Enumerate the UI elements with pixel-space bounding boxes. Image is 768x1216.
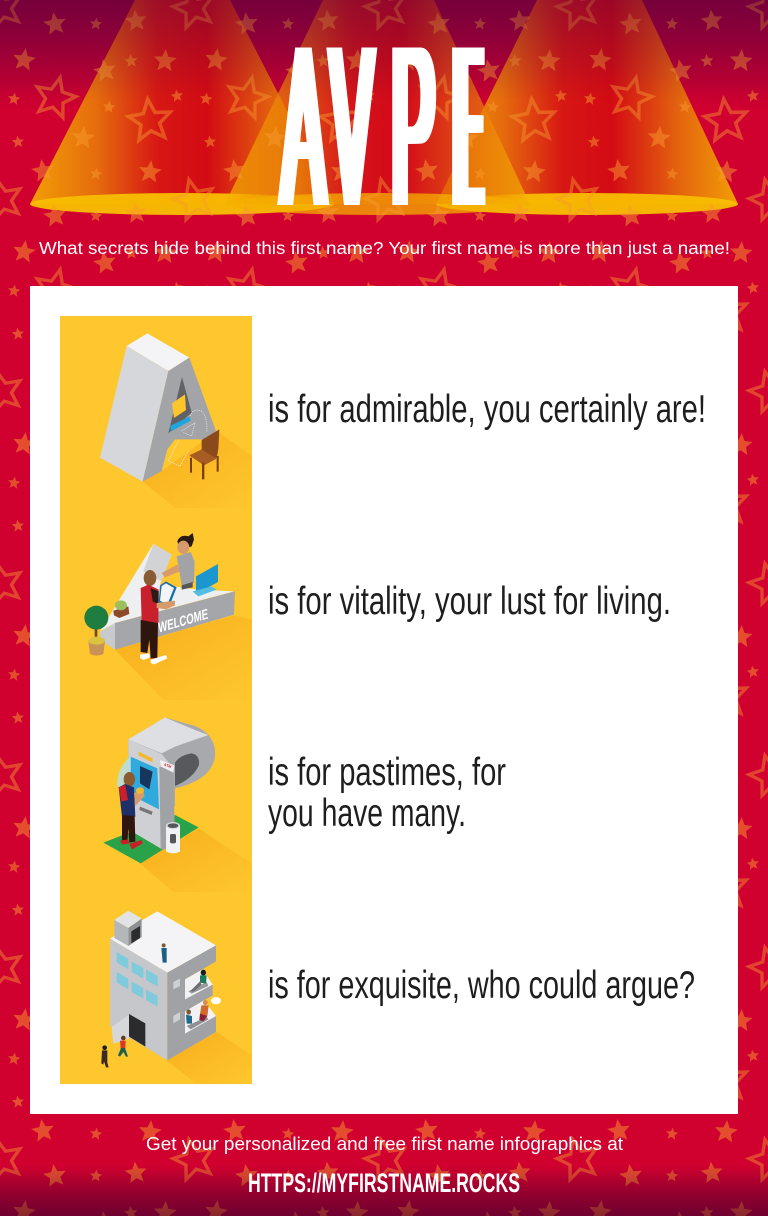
grass mat: [103, 815, 199, 863]
icon: office building shaped like letter E: [101, 911, 252, 1084]
spotlights: [30, 0, 738, 215]
monitor: [193, 564, 218, 596]
icon: reception desk with WELCOME sign: [84, 533, 252, 700]
title: [277, 0, 486, 254]
receptionist: [162, 533, 195, 590]
P bowl: [128, 717, 215, 807]
title: E: [449, 0, 474, 254]
ATM label: ATM: [163, 763, 172, 769]
text: P: you have many.: [268, 792, 466, 835]
potted tree: [84, 606, 108, 656]
white content panel: [30, 286, 738, 1114]
top shading: [0, 0, 768, 100]
customer: [119, 772, 145, 849]
footer line: Get your personalized and free first name infographics at: [146, 1133, 623, 1154]
windows: [117, 952, 158, 1007]
title: P: [387, 0, 430, 254]
text: P: is for pastimes, for: [268, 751, 506, 794]
footer URL: HTTPS://MYFIRSTNAME.ROCKS: [248, 1168, 520, 1198]
label: WELCOME: WELCOME: [158, 605, 209, 636]
subtitle: What secrets hide behind this first name? Your first name is more than just a name!: [39, 238, 730, 258]
spotlight: centre: [225, 0, 530, 215]
walking people: [101, 1036, 128, 1067]
spotlight: left: [30, 0, 335, 215]
stair block: [114, 911, 142, 946]
spotlight: right: [436, 0, 738, 215]
rooftop person: [161, 943, 167, 963]
yellow illustration column: [60, 316, 252, 1084]
title: V: [326, 0, 368, 254]
icon: ATM shaped like letter P: [103, 717, 252, 892]
ATM label: [160, 760, 174, 773]
balcony people: [186, 970, 221, 1024]
small planter: [113, 600, 129, 618]
trash bin: [166, 822, 180, 853]
title: A: [277, 0, 320, 254]
icon: letter A with desk and chair: [100, 333, 252, 508]
text: P: [268, 751, 506, 835]
visitor: [140, 570, 177, 664]
entrance: [112, 1014, 145, 1047]
bottom shading: [0, 1165, 768, 1216]
ATM screen: [131, 757, 159, 809]
